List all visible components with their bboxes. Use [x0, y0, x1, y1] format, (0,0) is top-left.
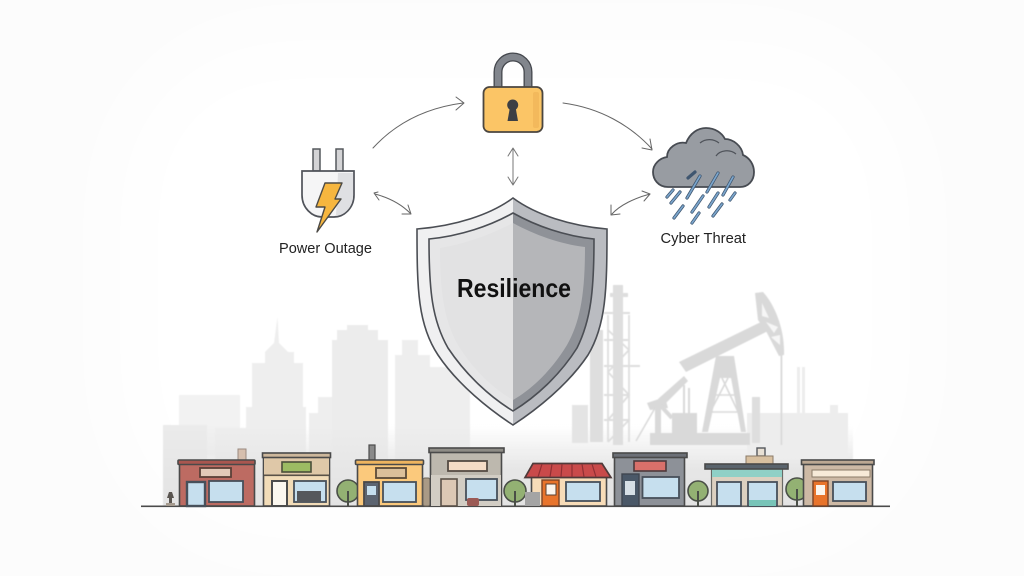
store 8: beige: [802, 460, 874, 506]
arrow: cloud to shield: [611, 191, 650, 215]
tree 2: [504, 480, 526, 506]
store 6: slate: [613, 453, 687, 506]
skyline silhouette: refinery and pumpjack: [572, 285, 848, 458]
ground line: [141, 506, 890, 507]
store 2: tan: [262, 453, 330, 506]
store 7: teal: [705, 448, 788, 506]
tree 3: [688, 481, 708, 506]
street lamp: [166, 492, 175, 506]
icon: storm cloud: [653, 128, 754, 223]
store 4: grey: [429, 448, 504, 506]
pumpjack: [636, 292, 784, 445]
icon: power plug: [302, 149, 354, 232]
heading: resilience: Resilience: [457, 273, 571, 303]
shield: [417, 198, 607, 425]
refinery towers: [572, 285, 640, 445]
store 5: red roof: [525, 464, 611, 506]
label: power outage: Power Outage: [279, 241, 372, 257]
skyline silhouette: city: [163, 317, 853, 506]
icon: lightning bolt: [316, 183, 342, 232]
arrow: plug to lock: [373, 97, 464, 148]
label: cyber threat: Cyber Threat: [660, 231, 746, 247]
store 1: red brick: [178, 449, 255, 506]
storefront row: [141, 445, 890, 507]
arrow: lock to shield: [508, 148, 518, 185]
tree 1: [337, 480, 359, 506]
arrow: plug to shield: [374, 192, 411, 214]
rain: [667, 172, 735, 223]
side annex: [423, 478, 430, 506]
arrow: lock to cloud: [563, 103, 652, 150]
background industrial blocks: [747, 367, 848, 458]
store 3: yellow: [356, 445, 424, 506]
tree 4: [786, 478, 808, 506]
icon: lock: [484, 57, 542, 132]
